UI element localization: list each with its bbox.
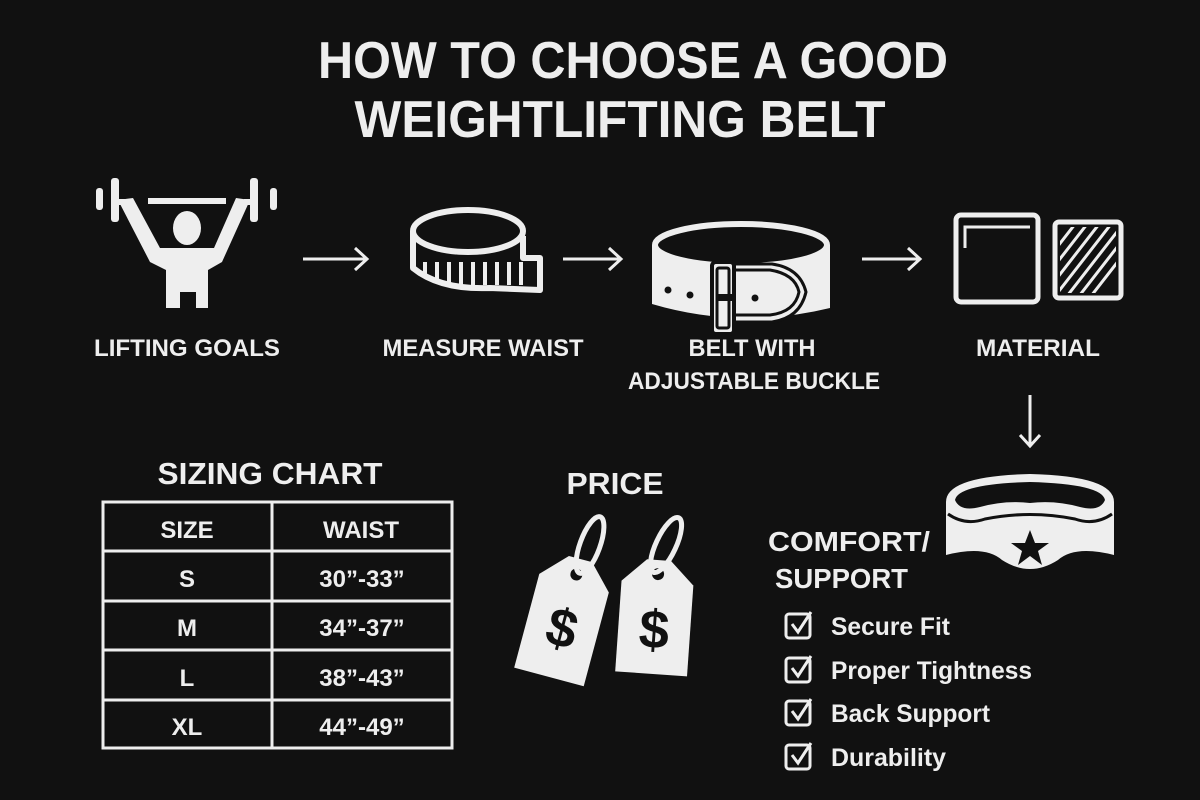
heading: comfort/support: SUPPORT: [775, 563, 908, 594]
label: belt with adjustable buckle: [628, 335, 880, 395]
checklist: Durability: [831, 744, 946, 772]
sizing table: XL: [172, 714, 202, 741]
sizing table: SIZE: [160, 517, 214, 544]
heading: comfort/support: COMFORT/: [768, 526, 930, 557]
icon: price tags: $: [637, 599, 671, 661]
icon: measuring tape: [413, 210, 540, 290]
icon: price tags: [514, 513, 695, 686]
sizing table: 38”-43”: [319, 665, 405, 692]
checklist: Proper Tightness: [831, 657, 1032, 685]
sizing table: L: [180, 665, 194, 692]
title: [318, 32, 948, 149]
sizing table: S: [179, 566, 195, 593]
heading: price: PRICE: [566, 466, 664, 501]
sizing table: WAIST: [323, 517, 399, 544]
sizing table: 44”-49”: [319, 714, 405, 741]
label: measure waist: MEASURE WAIST: [382, 335, 584, 362]
checklist: [786, 612, 1032, 772]
checklist: Secure Fit: [831, 613, 951, 641]
heading: comfort/support: [768, 526, 930, 594]
title: WEIGHTLIFTING BELT: [354, 91, 886, 149]
sizing table: 30”-33”: [319, 566, 405, 593]
icon: comfort belt with star: [946, 474, 1114, 569]
arrow 1: [303, 248, 367, 270]
heading: sizing chart: SIZING CHART: [158, 456, 383, 491]
checklist: Back Support: [831, 700, 991, 728]
sizing table: [103, 502, 452, 748]
icon: price tags: $: [540, 596, 584, 661]
arrow 2: [563, 248, 621, 270]
sizing table: M: [177, 615, 197, 642]
sizing table: 34”-37”: [319, 615, 405, 642]
label: belt with adjustable buckle: ADJUSTABLE BUCKLE: [628, 368, 880, 395]
icon: weightlifter: [96, 178, 277, 308]
label: material: MATERIAL: [976, 335, 1100, 362]
title: HOW TO CHOOSE A GOOD: [318, 32, 948, 90]
icon: belt with buckle: [652, 224, 830, 334]
icon: material swatches: [954, 212, 1124, 304]
arrow down: [1020, 395, 1040, 446]
label: lifting goals: LIFTING GOALS: [94, 335, 280, 362]
label: belt with adjustable buckle: BELT WITH: [688, 335, 816, 362]
arrow 3: [862, 248, 920, 270]
